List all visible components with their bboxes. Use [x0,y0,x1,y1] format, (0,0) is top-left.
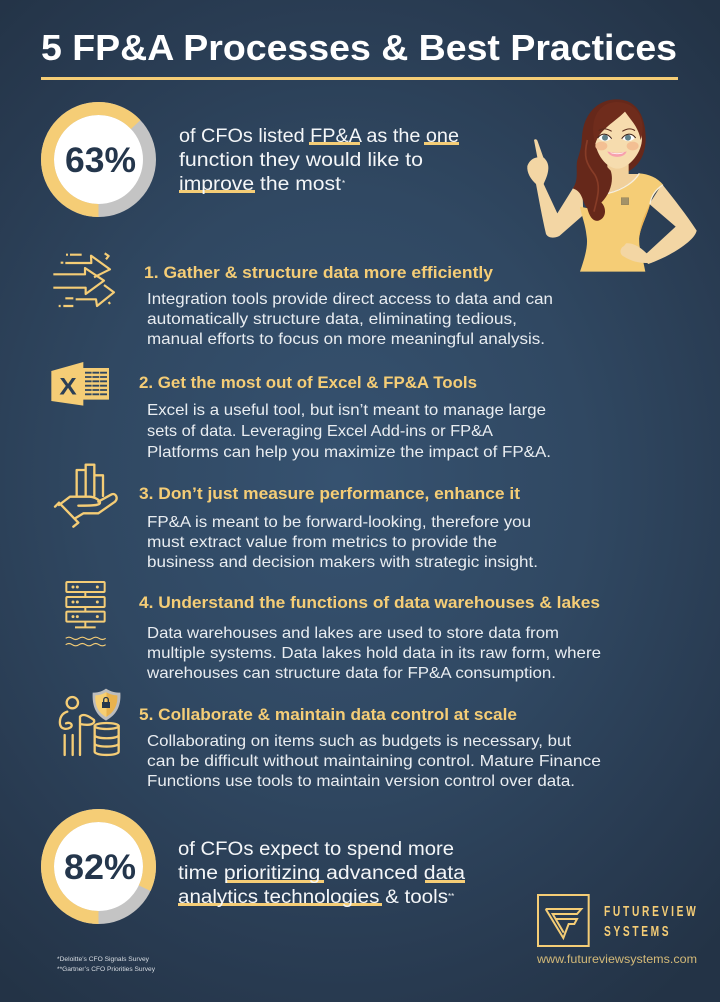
smile [607,151,627,157]
shirt [580,173,663,272]
stat text: 82% of CFOs [178,839,465,908]
right arm [640,184,697,264]
body 5: Collaborating on items such as budgets is necessary, but [147,733,572,750]
stat text: 82% of CFOs: analytics technologies & tools [178,887,448,908]
cheeks [595,142,607,150]
body 5: can be difficult without maintaining control. Mature Finance [147,753,601,770]
body 3: FP&A is meant to be forward-looking, therefore you [147,514,531,531]
icon: excel: X [59,374,77,401]
face [595,111,642,169]
title: 5 FP&A Processes & Best Practices [41,27,677,68]
body 5 [147,733,601,790]
icon: data warehouse and lake [66,582,106,646]
donut: 82% [48,816,150,918]
stat text: 82% of CFOs: time prioritizing advanced data [178,863,465,884]
footnotes: **Gartner’s CFO Priorities Survey [57,966,156,973]
title rule [41,77,678,80]
hair back [581,99,646,171]
icon: hand with bar chart [55,465,117,527]
stat text: 82% of CFOs: of CFOs expect to spend more [178,839,454,860]
footnotes [57,956,156,973]
left arm with pointing finger [527,139,583,238]
logo wordmark: FUTUREVIEW [604,902,697,920]
body 2: Excel is a useful tool, but isn’t meant to manage large [147,402,546,419]
illustration: woman pointing [527,99,697,272]
heading 1: 1. Gather & structure data more efficiently [144,264,494,282]
stat text: 82% of CFOs: ** [448,892,454,901]
icon: person, shield and database [60,689,120,755]
stat text: 63% of CFOs: improve the most [179,174,342,195]
heading 3: 3. Don’t just measure performance, enhance it [139,485,521,503]
body 2 [147,402,551,461]
website url: www.futureviewsystems.com [536,952,697,966]
body 4: warehouses can structure data for FP&A consumption. [146,665,556,682]
eyelashes and brows [598,134,636,139]
body 2: Platforms can help you maximize the impact of FP&A. [147,444,551,461]
logo: SYSTEMS [604,922,669,940]
hair wave highlight [586,140,598,212]
hand on hip [620,243,657,263]
icon: data arrows [53,253,114,306]
body 5: Functions use tools to maintain version control over data. [147,773,575,790]
body 1 [147,291,553,348]
heading 5: 5. Collaborate & maintain data control at scale [139,706,517,724]
body 4: multiple systems. Data lakes hold data in its raw form, where [147,645,601,662]
body 1: automatically structure data, eliminating tedious, [147,311,517,328]
stat text: 63% of CFOs: * [342,179,345,188]
eyes [599,135,611,141]
body 4: Data warehouses and lakes are used to store data from [147,625,559,642]
body 4 [146,625,601,682]
body 2: sets of data. Leveraging Excel Add-ins or FP&A [147,423,494,440]
logo [536,895,697,966]
body 3: business and decision makers with strategic insight. [147,554,538,571]
neck and chest [603,160,639,194]
shirt badge [621,198,629,205]
heading 4: 4. Understand the functions of data warehouses & lakes [139,594,600,612]
body 1: Integration tools provide direct access to data and can [147,291,553,308]
front hair lock [573,123,612,221]
donut: 82%: 82% [64,848,136,887]
stat text: 63% of CFOs: of CFOs listed FP&A as the one [179,126,459,147]
fringe hair [593,102,643,144]
logo mark [538,895,589,946]
shirt collar trim [603,173,663,204]
shirt side shading [639,204,650,248]
body 3 [147,514,538,571]
stat text: 63% of CFOs [179,126,459,195]
donut: 63% [48,108,150,210]
stat text: 63% of CFOs: function they would like to [179,150,423,171]
icon: excel [51,362,109,406]
donut: 63%: 63% [65,141,136,180]
body 1: manual efforts to focus on more meaningful analysis. [147,331,545,348]
footnotes: *Deloitte’s CFO Signals Survey [57,956,150,963]
heading 2: 2. Get the most out of Excel & FP&A Tools [139,374,477,392]
body 3: must extract value from metrics to provide the [147,534,497,551]
